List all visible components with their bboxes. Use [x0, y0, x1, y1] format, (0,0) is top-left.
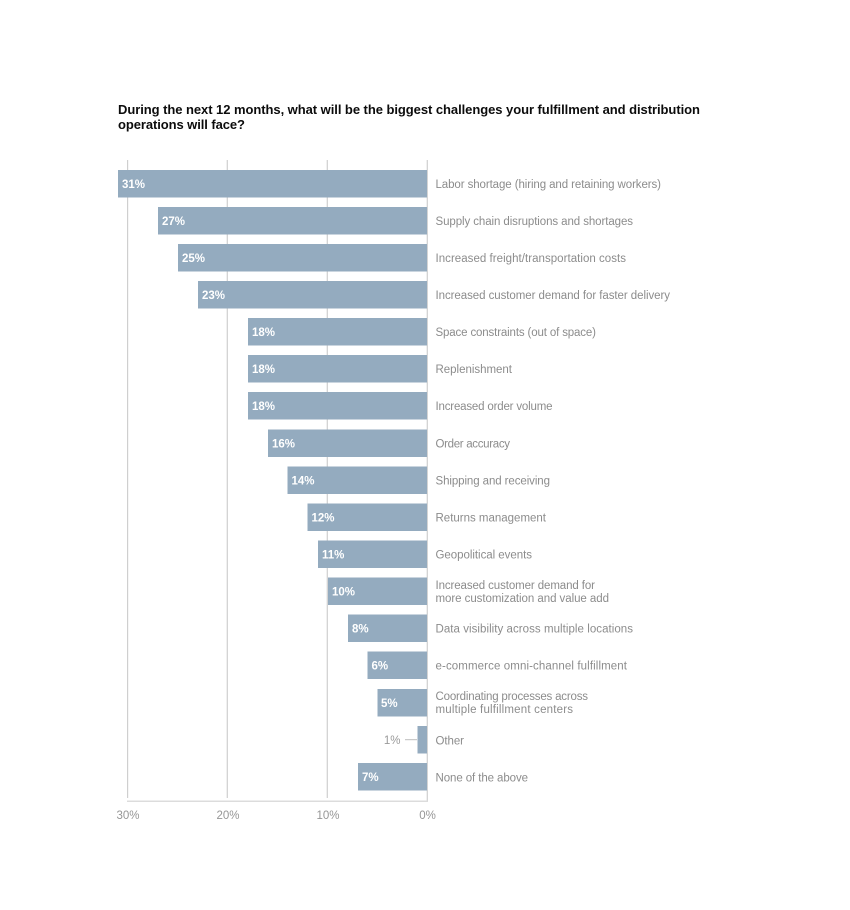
bar: none of the above 7%: 7% — [362, 772, 379, 784]
bar: returns management 12%: Returns management — [436, 512, 547, 524]
bar: omni-channel 6%: 6% — [372, 660, 388, 672]
bar: space constraints 18% — [248, 318, 596, 346]
bar: order accuracy 16% — [268, 430, 510, 457]
axis tick labels: 0% — [419, 810, 436, 822]
bar: faster delivery 23%: Increased customer demand for faster delivery — [436, 290, 670, 302]
bar: other 1%: 1% — [384, 735, 400, 747]
bar: none of the above 7% — [358, 763, 528, 790]
bar: order volume 18% — [248, 392, 552, 420]
bar: data visibility 8%: 8% — [352, 624, 369, 636]
bar: returns management 12% — [308, 504, 547, 531]
chart: horizontal bar chart of challenges — [116, 160, 670, 822]
bar: supply chain 27%: 27% — [162, 216, 185, 228]
bar: freight costs 25%: Increased freight/transportation costs — [436, 253, 626, 265]
bar: order volume 18%: Increased order volume — [436, 401, 552, 413]
bar: customization 10%: more customization and value add — [436, 593, 609, 605]
bar: geopolitical events 11%: Geopolitical events — [436, 550, 532, 562]
bar: geopolitical events 11%: 11% — [322, 550, 344, 562]
bar: faster delivery 23%: 23% — [202, 290, 225, 302]
axis grid lines — [127, 160, 428, 802]
bar: coordinating processes 5% — [378, 689, 588, 716]
axis tick labels: 30% — [116, 810, 140, 822]
bar: returns management 12%: 12% — [312, 512, 335, 524]
title: operations will face? — [118, 117, 245, 132]
bar: customization 10%: Increased customer demand for — [436, 580, 595, 592]
bar: space constraints 18%: 18% — [252, 327, 275, 339]
bar: space constraints 18%: Space constraints (out of space) — [436, 327, 596, 339]
bar: supply chain 27%: Supply chain disruptions and shortages — [436, 216, 633, 228]
bar: shipping and receiving 14% — [288, 466, 550, 494]
bar: shipping and receiving 14%: Shipping and receiving — [436, 476, 550, 488]
axis tick labels: 10% — [316, 810, 340, 822]
bar: order volume 18%: 18% — [252, 401, 275, 413]
bar: freight costs 25% — [178, 244, 626, 272]
axis tick labels: 20% — [216, 810, 240, 822]
bar: replenishment 18%: 18% — [252, 364, 275, 376]
bar: freight costs 25%: 25% — [182, 253, 205, 265]
bar: order accuracy 16%: 16% — [272, 438, 295, 450]
bar: coordinating processes 5%: multiple fulfillment centers — [436, 704, 573, 716]
bar: labor shortage 31%: Labor shortage (hiring and retaining workers) — [436, 179, 661, 191]
bar: order accuracy 16%: Order accuracy — [436, 438, 510, 450]
bar: coordinating processes 5%: Coordinating processes across — [436, 691, 588, 703]
bar: other 1%: Other — [436, 736, 464, 748]
bar: labor shortage 31% — [118, 170, 661, 198]
bar: data visibility 8%: Data visibility across multiple locations — [436, 624, 633, 636]
bar: geopolitical events 11% — [318, 540, 532, 568]
bar: replenishment 18% — [248, 355, 513, 382]
bar: shipping and receiving 14%: 14% — [292, 476, 315, 488]
bar: labor shortage 31%: 31% — [122, 179, 145, 191]
bar: customization 10% — [328, 578, 609, 605]
bar: data visibility 8% — [348, 614, 633, 642]
title — [118, 102, 700, 132]
bar: omni-channel 6% — [368, 652, 628, 679]
bar: customization 10%: 10% — [332, 586, 355, 598]
bar: none of the above 7%: None of the above — [436, 772, 528, 784]
bar: coordinating processes 5%: 5% — [381, 698, 398, 710]
bar: replenishment 18%: Replenishment — [436, 364, 513, 376]
bar: omni-channel 6%: e-commerce omni-channel fulfillment — [436, 660, 628, 672]
bar: other 1% — [384, 726, 464, 754]
axis tick labels — [116, 810, 436, 822]
bar: supply chain 27% — [158, 207, 633, 234]
bar: faster delivery 23% — [198, 281, 670, 308]
title: During the next 12 months, what will be the biggest challenges your fulfillment and distribution — [118, 102, 700, 117]
